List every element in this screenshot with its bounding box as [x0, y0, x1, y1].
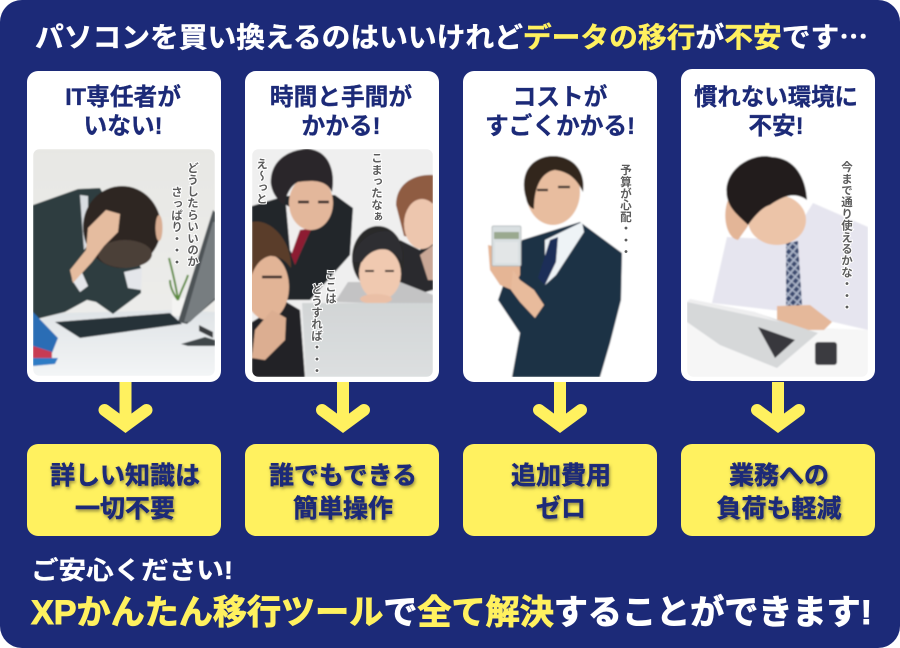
heading: unfamiliar environment: 不安!: [748, 113, 804, 140]
photo: man struggling at laptop: [687, 150, 868, 377]
panel: unfamiliar environment: [681, 69, 875, 381]
heading: high cost: [485, 83, 635, 140]
solution box 4: 業務への: [729, 462, 829, 490]
heading: unfamiliar environment: [694, 84, 858, 140]
conclusion headline: XPかんたん移行ツールで全て解決することができます!: [31, 593, 872, 632]
heading: no IT staff: IT専任者が: [65, 83, 181, 111]
heading: high cost: コストが: [513, 83, 608, 111]
heading: takes time: かかる!: [302, 114, 380, 140]
solution box 1: [27, 444, 221, 536]
arrow 1: [104, 382, 146, 426]
conclusion lead: ご安心ください!: [31, 556, 233, 585]
solution box 4: 負荷も軽減: [716, 495, 842, 523]
panel: takes time: [245, 71, 440, 382]
speech text: man 1: [170, 162, 199, 268]
speech text: colleagues: [255, 152, 383, 377]
heading: takes time: 時間と手間が: [270, 83, 412, 111]
speech text: colleagues: え〜っと: [255, 158, 267, 205]
speech text: colleagues: どうすれば・・・: [310, 283, 323, 377]
solution box 4: [681, 444, 875, 536]
photo: four colleagues at laptop: [245, 149, 440, 377]
panel: high cost: [463, 71, 657, 382]
solution box 2: 簡単操作: [293, 495, 393, 523]
solution box 3: [463, 444, 657, 536]
speech text: budget worry: 予算が心配・・・: [619, 164, 632, 258]
photo: man with calculator: [487, 155, 623, 377]
speech text: colleagues: こまったなぁ: [370, 152, 383, 222]
title: パソコンを買い換えるのはいいけれど データの移行が不安です…: [35, 16, 868, 56]
panel: no IT staff: [27, 71, 221, 382]
arrow 2: [322, 382, 364, 426]
heading: unfamiliar environment: 慣れない環境に: [694, 84, 858, 111]
speech text: man 4: 今まで通り使えるかな・・・: [840, 160, 853, 313]
solution box 2: 誰でもできる: [269, 462, 417, 490]
heading: high cost: すごくかかる!: [485, 112, 635, 140]
arrow 3: [539, 382, 581, 426]
heading: no IT staff: いない!: [84, 114, 162, 140]
solution box 2: [245, 444, 439, 536]
solution box 3: ゼロ: [536, 494, 586, 523]
solution box 1: 詳しい知識は: [50, 462, 200, 490]
speech text: colleagues: ここは: [324, 269, 336, 304]
arrow 4: [757, 382, 799, 426]
solution box 1: 一切不要: [75, 495, 175, 523]
speech text: man 1: どうしたらいいのか: [186, 162, 199, 267]
photo: man holding head at desk: [33, 149, 215, 376]
speech text: man 1: さっぱり・・・: [170, 186, 183, 268]
heading: takes time: [270, 83, 412, 140]
solution box 3: 追加費用: [511, 462, 611, 490]
heading: no IT staff: [65, 83, 181, 140]
